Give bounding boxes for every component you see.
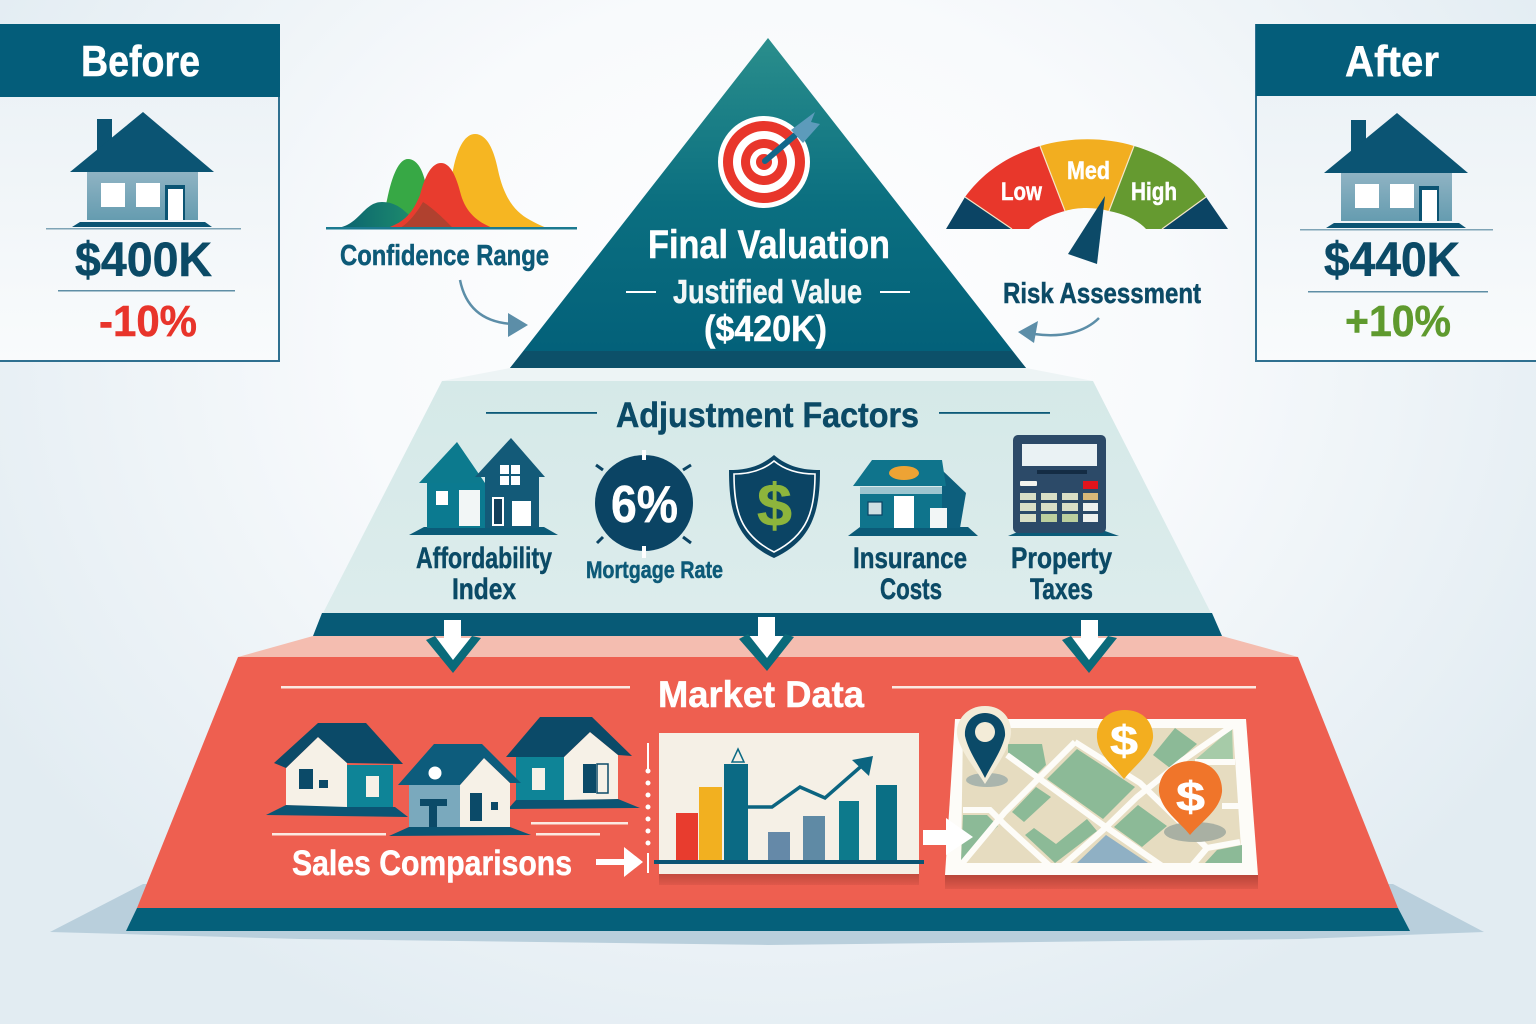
gauge: risk assessment: Med (1067, 157, 1110, 185)
after heading: After (1345, 37, 1439, 86)
before price: $400K (75, 234, 212, 287)
confidence range label: Confidence Range (340, 240, 549, 272)
arrow: confidence to apex (460, 280, 528, 337)
panel: after (1256, 24, 1536, 361)
risk assessment label: Risk Assessment (1003, 278, 1201, 310)
arrow: adjustment to market right (1062, 620, 1117, 673)
icon: orange dollar pin: $ (1176, 773, 1205, 820)
icon: yellow dollar pin: $ (1110, 717, 1138, 764)
after change: +10% (1345, 297, 1451, 346)
bar chart (654, 733, 924, 885)
trend line (748, 756, 873, 807)
affordability label (416, 542, 552, 606)
panel: before (0, 24, 280, 361)
icon: shield: $ (757, 472, 792, 539)
affordability label: Affordability (416, 542, 552, 575)
apex title: Final Valuation (648, 223, 890, 267)
icon: location pin (957, 706, 1011, 787)
sales comparisons label: Sales Comparisons (292, 844, 572, 883)
mortgage rate label: Mortgage Rate (586, 557, 723, 584)
market data heading: Market Data (658, 674, 864, 715)
insurance label: Costs (880, 573, 942, 606)
icon: yellow dollar pin (1097, 710, 1153, 779)
icon: target (718, 112, 820, 208)
gauge needle (1068, 196, 1105, 264)
divider dots (646, 743, 650, 873)
icon: orange dollar pin (1159, 761, 1226, 842)
adjustment heading: Adjustment Factors (616, 396, 919, 435)
arrow: adjustment to market center (739, 617, 794, 671)
insurance label: Insurance (853, 542, 967, 575)
arrow: adjustment to market left (426, 620, 481, 673)
gauge: risk assessment: Low (1001, 178, 1042, 206)
icon: mortgage rate badge: 6% (611, 476, 678, 534)
arrow: risk to apex (1018, 318, 1099, 343)
tier: adjustment factors (313, 368, 1222, 636)
icon: sales comparison houses (266, 717, 640, 836)
before change: -10% (99, 297, 197, 346)
icon: before house (46, 112, 241, 230)
chart: confidence range (326, 134, 577, 230)
value: ($420K) (704, 308, 827, 349)
icon: calculator (1008, 435, 1119, 536)
map (923, 706, 1258, 889)
affordability label: Index (452, 573, 516, 606)
house 2 (389, 744, 531, 836)
icon: mortgage rate badge (595, 450, 693, 558)
after price: $440K (1324, 234, 1460, 287)
gauge: risk assessment (946, 139, 1228, 264)
justified value: Justified Value (673, 273, 862, 310)
insurance label (853, 542, 967, 606)
icon: shield (729, 455, 820, 558)
tier: market data (126, 636, 1410, 931)
pyramid ground shadow (50, 884, 1484, 945)
house 3 (506, 717, 640, 809)
after heading (1256, 24, 1536, 96)
gauge: risk assessment: High (1131, 178, 1177, 206)
arrow: sales to chart (596, 847, 643, 877)
icon: affordability houses (409, 438, 558, 535)
icon: insurance house (848, 460, 978, 536)
house 1 (266, 723, 408, 817)
arrow: chart to map (923, 818, 973, 855)
before heading (0, 24, 280, 97)
icon: after house (1300, 113, 1493, 230)
property taxes label: Taxes (1030, 573, 1093, 606)
before heading: Before (81, 37, 200, 86)
tier: final valuation (510, 38, 1026, 368)
property taxes label: Property (1011, 542, 1112, 575)
property taxes label (1011, 542, 1112, 606)
